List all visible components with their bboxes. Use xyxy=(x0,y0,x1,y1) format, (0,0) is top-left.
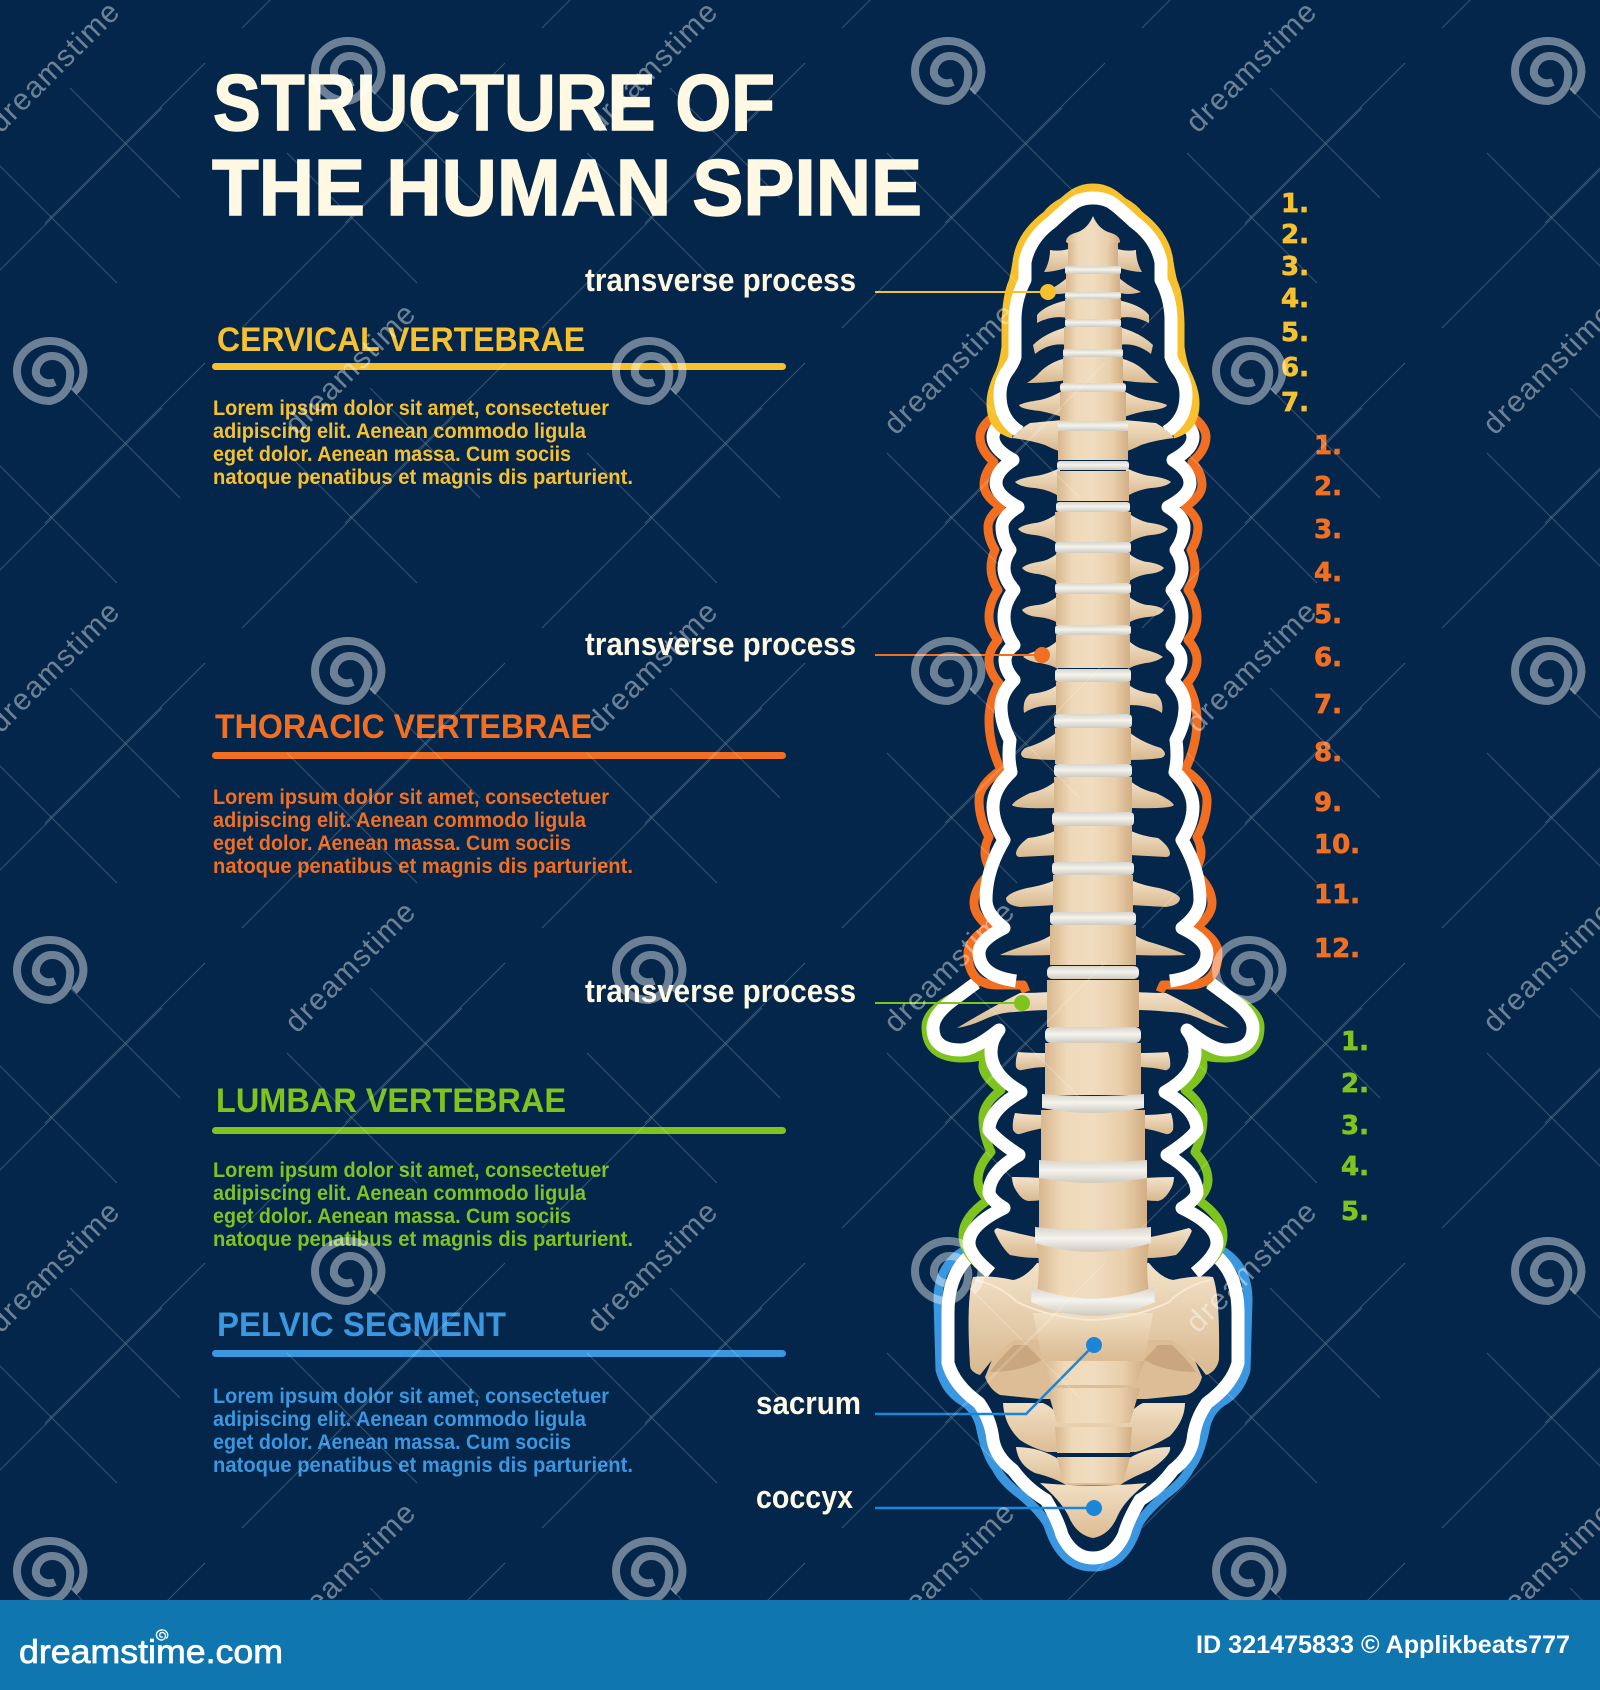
text block: pelvic xyxy=(213,1385,633,1477)
watermark overlay: dreamstime xyxy=(581,596,724,739)
callout: thoracic transverse process xyxy=(585,626,1050,663)
text block: pelvic: Lorem ipsum dolor sit amet, consectetuer xyxy=(213,1385,609,1408)
text block: thoracic: natoque penatibus et magnis dis parturient. xyxy=(213,855,633,878)
numbers: cervical xyxy=(1281,189,1309,418)
text block: lumbar: Lorem ipsum dolor sit amet, consectetuer xyxy=(213,1159,609,1182)
numbers: thoracic: 5. xyxy=(1314,600,1342,630)
underline: pelvic xyxy=(212,1350,786,1357)
underline: thoracic xyxy=(212,752,786,759)
callout: lumbar transverse process xyxy=(585,973,1030,1011)
numbers: lumbar: 5. xyxy=(1341,1197,1369,1227)
text block: cervical xyxy=(213,397,633,489)
title: THE HUMAN SPINE xyxy=(212,143,922,232)
numbers: thoracic: 4. xyxy=(1314,558,1342,588)
outline: cervical xyxy=(991,188,1195,434)
numbers: lumbar: 1. xyxy=(1341,1027,1369,1057)
numbers: cervical: 6. xyxy=(1281,353,1309,383)
numbers: thoracic: 11. xyxy=(1314,880,1360,910)
numbers: thoracic: 12. xyxy=(1314,934,1360,964)
intervertebral discs xyxy=(1031,266,1155,1316)
coccyx xyxy=(1040,1483,1147,1538)
callout: sacrum: sacrum xyxy=(756,1385,861,1421)
watermark overlay: dreamstime xyxy=(878,298,1021,441)
numbers: thoracic: 8. xyxy=(1314,738,1342,768)
numbers: thoracic: 2. xyxy=(1314,472,1342,502)
heading: pelvic: PELVIC SEGMENT xyxy=(217,1306,506,1344)
heading: lumbar: LUMBAR VERTEBRAE xyxy=(216,1082,566,1120)
callout: cervical transverse process xyxy=(585,262,1056,300)
text block: thoracic: adipiscing elit. Aenean commodo ligula xyxy=(213,809,586,832)
heading: thoracic: THORACIC VERTEBRAE xyxy=(215,708,592,746)
text block: pelvic: eget dolor. Aenean massa. Cum sociis xyxy=(213,1431,571,1454)
underline: lumbar xyxy=(212,1127,786,1134)
vertebral bodies xyxy=(1036,216,1150,1298)
outline: pelvic xyxy=(938,1247,1248,1567)
callout: thoracic transverse process: transverse process xyxy=(585,626,856,662)
panel: lumbar vertebrae xyxy=(212,1082,786,1251)
callout: cervical transverse process: transverse process xyxy=(585,262,856,298)
text block: lumbar xyxy=(213,1159,633,1251)
text block: thoracic: eget dolor. Aenean massa. Cum sociis xyxy=(213,832,571,855)
watermark overlay: dreamstime xyxy=(1180,1196,1323,1339)
numbers: lumbar xyxy=(1341,1027,1369,1227)
numbers: lumbar: 4. xyxy=(1341,1152,1369,1182)
numbers: thoracic: 9. xyxy=(1314,788,1342,818)
numbers: thoracic: 6. xyxy=(1314,643,1342,673)
sacrum and coccyx xyxy=(969,1263,1219,1538)
numbers: lumbar: 3. xyxy=(1341,1111,1369,1141)
numbers: thoracic: 10. xyxy=(1314,830,1360,860)
footer bar xyxy=(0,1600,1600,1690)
panel: thoracic vertebrae xyxy=(212,708,786,878)
numbers: cervical: 2. xyxy=(1281,220,1309,250)
numbers: cervical: 5. xyxy=(1281,318,1309,348)
numbers: thoracic xyxy=(1314,431,1360,964)
text block: cervical: natoque penatibus et magnis dis parturient. xyxy=(213,466,633,489)
text block: pelvic: adipiscing elit. Aenean commodo ligula xyxy=(213,1408,586,1431)
sacrum layers xyxy=(969,1263,1219,1485)
outline: lumbar xyxy=(926,980,1260,1273)
numbers: thoracic: 7. xyxy=(1314,690,1342,720)
numbers: cervical: 7. xyxy=(1281,388,1309,418)
callout: coccyx xyxy=(756,1479,1102,1516)
numbers: cervical: 4. xyxy=(1281,284,1309,314)
text block: cervical: Lorem ipsum dolor sit amet, consectetuer xyxy=(213,397,609,420)
watermark overlay: dreamstime xyxy=(279,1497,422,1640)
text block: pelvic: natoque penatibus et magnis dis parturient. xyxy=(213,1454,633,1477)
numbers: cervical: 3. xyxy=(1281,252,1309,282)
text block: lumbar: natoque penatibus et magnis dis parturient. xyxy=(213,1228,633,1251)
callout: lumbar transverse process: transverse process xyxy=(585,973,856,1009)
panel: cervical vertebrae xyxy=(212,321,786,489)
spine illustration xyxy=(957,216,1229,1538)
text block: lumbar: adipiscing elit. Aenean commodo ligula xyxy=(213,1182,586,1205)
footer logo: dreamstime.com xyxy=(19,1633,283,1670)
segment outlines around the spine xyxy=(926,188,1260,1567)
text block: cervical: eget dolor. Aenean massa. Cum sociis xyxy=(213,443,571,466)
numbers: thoracic: 1. xyxy=(1314,431,1342,461)
title xyxy=(212,58,922,232)
text block: cervical: adipiscing elit. Aenean commodo ligula xyxy=(213,420,586,443)
watermark overlay: dreamstime xyxy=(279,298,422,441)
panel: pelvic segment xyxy=(212,1306,786,1477)
transverse processes xyxy=(957,248,1229,1258)
underline: cervical xyxy=(212,363,786,370)
text block: thoracic xyxy=(213,786,633,878)
outline: thoracic xyxy=(968,417,1218,992)
watermark overlay: dreamstime xyxy=(279,896,422,1039)
callout: sacrum xyxy=(756,1337,1102,1421)
text block: lumbar: eget dolor. Aenean massa. Cum sociis xyxy=(213,1205,571,1228)
numbers: lumbar: 2. xyxy=(1341,1069,1369,1099)
watermark overlay: dreamstime xyxy=(878,896,1021,1039)
footer logo icon xyxy=(156,1630,168,1640)
watermark overlay: dreamstime xyxy=(581,1196,724,1339)
footer credit: ID 321475833 © Applikbeats777 xyxy=(1196,1631,1570,1659)
heading: cervical: CERVICAL VERTEBRAE xyxy=(217,321,585,359)
numbers: cervical: 1. xyxy=(1281,189,1309,219)
callout: coccyx: coccyx xyxy=(756,1479,853,1515)
watermark overlay: dreamstime xyxy=(1180,596,1323,739)
numbers: thoracic: 3. xyxy=(1314,515,1342,545)
text block: thoracic: Lorem ipsum dolor sit amet, consectetuer xyxy=(213,786,609,809)
title: STRUCTURE OF xyxy=(213,58,775,147)
watermark overlay: dreamstime xyxy=(878,1497,1021,1640)
